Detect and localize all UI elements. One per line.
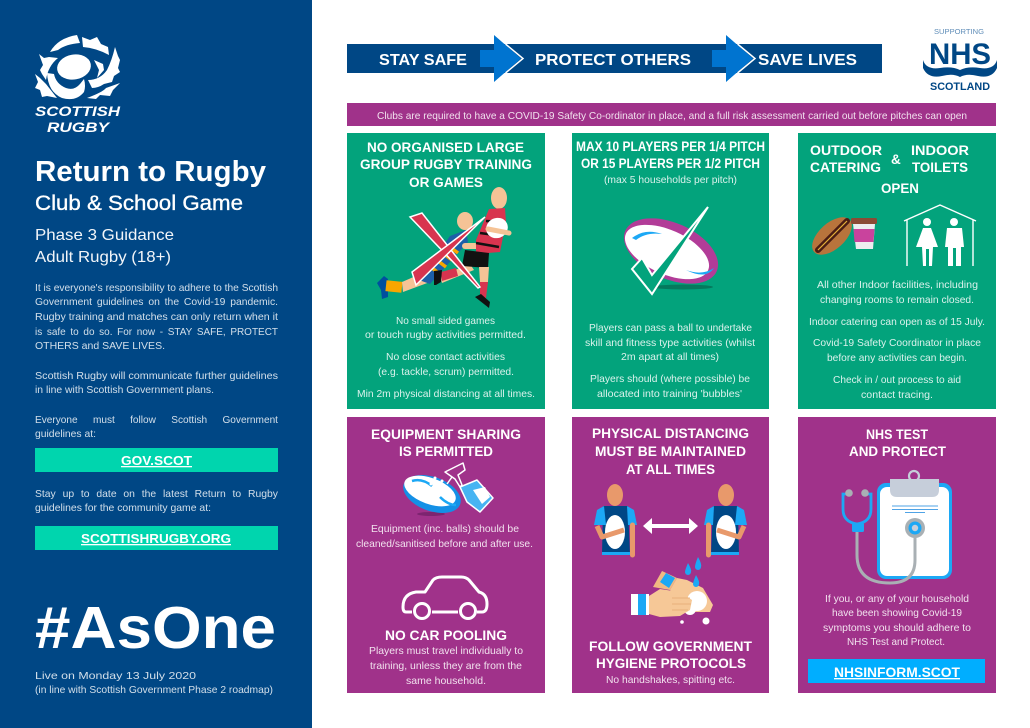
text block: responsibility: It is everyone's responsibility to adhere to the Scottish [35,282,278,294]
arrow 1 [480,35,523,82]
body text [809,279,985,401]
panel: max players per pitch [572,133,769,409]
icon: rugby ball with tick [614,205,728,297]
heading: GROUP RUGBY TRAINING [360,157,532,172]
hashtag: #AsOne [35,595,276,661]
heading [576,139,765,186]
panel: NHS test and protect [798,417,996,693]
body text: equipment: Equipment (inc. balls) should be [371,523,519,535]
age line: Adult Rugby (18+) [35,249,171,266]
body text: 2m apart at all times) [621,351,719,363]
text block: stay up to date: guidelines for the community game at: [35,502,211,514]
body text: equipment: cleaned/sanitised before and after use. [356,538,533,550]
logo: NHS Scotland: SUPPORTING [934,27,984,36]
body text [585,322,755,400]
text block: further guidelines: in line with Scottish Government plans. [35,384,214,396]
heading: MAX 10 PLAYERS PER 1/4 PITCH [576,139,765,154]
button: nhsinform.scot: NHSINFORM.SCOT [834,665,961,680]
heading: OUTDOOR [810,143,882,158]
panel: outdoor catering and indoor toilets [798,133,996,409]
icon: hot dog and coffee [805,210,877,262]
text block: follow guidelines: guidelines at: [35,428,96,440]
heading: TOILETS [912,160,968,175]
heading [849,427,947,459]
body text: No small sided games [396,315,495,327]
body text: changing rooms to remain closed. [820,294,974,306]
text block: responsibility: Rugby training and matches can only return when it [35,311,278,323]
slogan text [379,52,857,69]
icon: distance arrow [643,518,698,534]
button: gov.scot [35,448,278,472]
text block: responsibility: OTHERS and SAVE LIVES. [35,340,165,352]
body text: symptoms you should adhere to [823,622,971,634]
heading: hygiene: HYGIENE PROTOCOLS [596,656,746,671]
body text: Min 2m physical distancing at all times. [357,388,535,400]
body text: have been showing Covid-19 [832,607,962,619]
panel: equipment sharing and car pooling [347,417,545,693]
body text [823,593,971,648]
heading: INDOOR [911,143,969,158]
logo: Scottish Rugby thistle [35,35,120,135]
icon: person right [704,484,747,555]
body text: (e.g. tackle, scrum) permitted. [378,366,514,378]
heading: & [891,152,901,167]
body text: Players can pass a ball to undertake [589,322,752,334]
text block: responsibility: is safe to do so. For now - STAY SAFE, PROTECT [35,326,279,338]
body text: allocated into training 'bubbles' [597,388,742,400]
icon: person left [594,484,637,555]
body text: No close contact activities [386,351,505,363]
body text: All other Indoor facilities, including [817,279,978,291]
heading: no car pooling: NO CAR POOLING [385,628,507,643]
slogan arrow banner [347,35,882,82]
body text: Players should (where possible) be [590,373,750,385]
heading: AND PROTECT [849,444,947,459]
text block: follow guidelines: Everyone must follow Scottish Government [35,414,278,426]
body text: Check in / out process to aid [833,374,961,386]
body text: If you, or any of your household [825,593,969,605]
button: scottishrugby.org: SCOTTISHRUGBY.ORG [81,531,231,546]
phase line: Phase 3 Guidance [35,227,174,244]
body text: or touch rugby activities permitted. [365,329,526,341]
heading: equipment: IS PERMITTED [399,444,493,459]
icon: clipboard and stethoscope [843,471,952,583]
footer note: Live on Monday 13 July 2020 [35,670,196,682]
heading: distancing [592,426,749,477]
footer note [35,670,273,696]
body text: equipment [356,523,533,550]
button: nhsinform.scot [808,659,985,683]
heading: OR GAMES [409,175,483,190]
icon: hand washing [631,557,713,624]
title: Return to Rugby [35,156,266,188]
body text: car pooling [369,645,523,687]
text block: further guidelines [35,370,278,396]
logo: NHS Scotland: SCOTLAND [930,81,990,93]
body text [357,315,535,400]
heading [360,140,532,190]
slogan text: PROTECT OTHERS [535,52,691,69]
icon: toilets building [904,205,976,266]
button: scottishrugby.org [35,526,278,550]
body text: before any activities can begin. [827,352,967,364]
text block: responsibility [35,282,279,352]
notice banner [347,103,996,126]
heading: OR 15 PLAYERS PER 1/2 PITCH [581,156,760,171]
heading: distancing: AT ALL TIMES [626,462,715,477]
body text: car pooling: training, unless they are from the [370,660,522,672]
heading: equipment [371,427,521,459]
slogan text: STAY SAFE [379,52,467,69]
heading: NO ORGANISED LARGE [367,140,524,155]
icon: rugby tackle crossed out [377,187,511,308]
logo: NHS Scotland [923,27,997,93]
text block: further guidelines: Scottish Rugby will communicate further guidelines [35,370,278,382]
body text: skill and fitness type activities (whilst [585,337,755,349]
heading: NHS TEST [866,427,929,442]
logo: NHS Scotland: NHS [929,38,991,71]
logo wordmark: SCOTTISH [35,104,120,119]
heading: distancing: MUST BE MAINTAINED [595,444,746,459]
panel: left sidebar [0,0,312,728]
heading: distancing: PHYSICAL DISTANCING [592,426,749,441]
logo wordmark [35,104,120,135]
heading: hygiene: FOLLOW GOVERNMENT [589,639,753,654]
body text: car pooling: Players must travel individually to [369,645,523,657]
button: gov.scot: GOV.SCOT [121,453,192,468]
icon: ball and spray bottle [398,463,493,520]
logo wordmark: RUGBY [47,120,112,135]
footer note: (in line with Scottish Government Phase 2 roadmap) [35,684,273,696]
body text: Indoor catering can open as of 15 July. [809,316,985,328]
text block: follow guidelines [35,414,278,440]
heading [810,143,969,196]
notice banner: Clubs are required to have a COVID-19 Safety Co-ordinator in place, and a full risk assessment carried out before pitches can open [377,110,967,122]
heading: OPEN [881,181,919,196]
body text: hygiene: No handshakes, spitting etc. [606,674,735,686]
body text: Covid-19 Safety Coordinator in place [813,337,981,349]
body text: NHS Test and Protect. [847,636,945,648]
heading: hygiene [589,639,753,671]
heading: equipment: EQUIPMENT SHARING [371,427,521,442]
text block: stay up to date: Stay up to date on the latest Return to Rugby [35,488,279,500]
body text: contact tracing. [861,389,933,401]
panel: physical distancing and hygiene [572,417,769,693]
text block: stay up to date [35,488,279,514]
arrow 2 [712,35,755,82]
icon: car [403,577,487,618]
panel: no organised large group rugby [347,133,545,409]
body text: car pooling: same household. [406,675,486,687]
heading: (max 5 households per pitch) [604,174,737,186]
subtitle: Club & School Game [35,192,243,215]
text block: responsibility: Government guidelines on the Covid-19 pandemic. [35,296,278,308]
slogan text: SAVE LIVES [758,52,857,69]
heading: CATERING [810,160,881,175]
